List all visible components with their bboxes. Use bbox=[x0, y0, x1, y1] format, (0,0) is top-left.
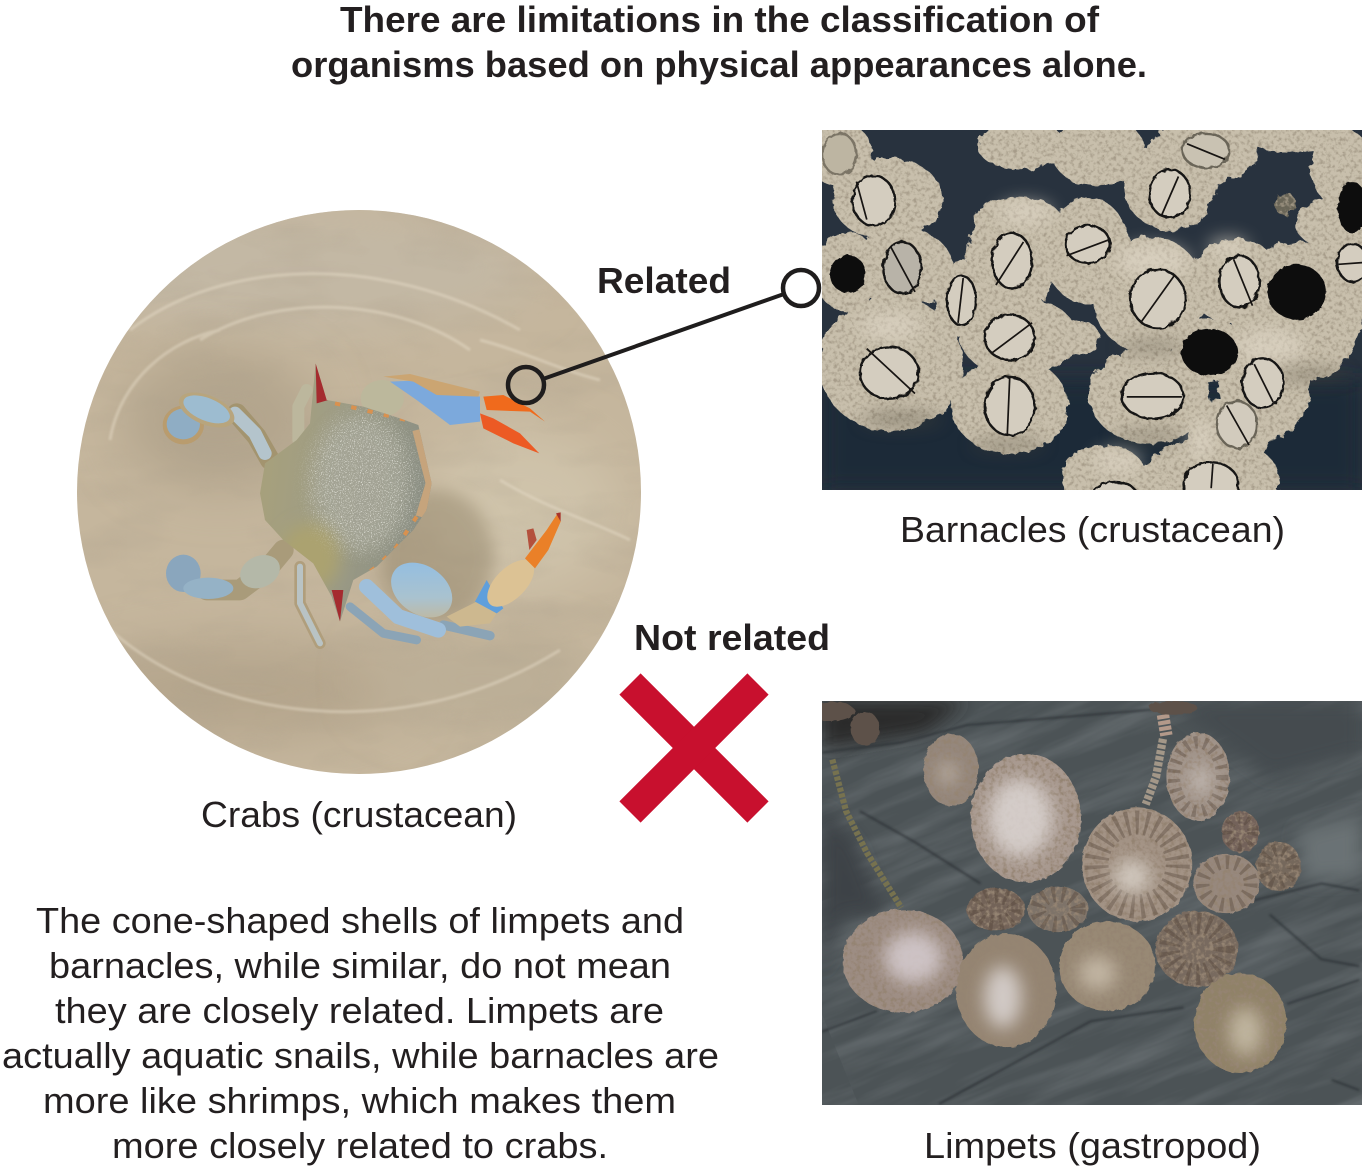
top-left corner limpets bbox=[807, 701, 1197, 746]
photo: crab in circle bbox=[60, 210, 641, 774]
icon: red cross bbox=[630, 684, 758, 812]
crab shadow bbox=[380, 490, 493, 623]
barnacle shadows bbox=[860, 341, 1349, 452]
barnacle holes bbox=[830, 182, 1363, 376]
limpet highlights bbox=[884, 764, 1262, 1056]
barnacle highlights bbox=[860, 201, 1304, 473]
rock cracks bbox=[822, 710, 1359, 1104]
label: limpets: Limpets (gastropod) bbox=[924, 1125, 1261, 1166]
photo: limpets bbox=[807, 701, 1362, 1105]
label: crabs: Crabs (crustacean) bbox=[201, 794, 517, 835]
body text bbox=[2, 900, 719, 1166]
crab upper claw bbox=[384, 374, 545, 454]
barnacle openings bbox=[822, 133, 1363, 510]
crab left paddles bbox=[163, 385, 285, 599]
body text: they are closely related. Limpets are bbox=[55, 990, 664, 1031]
title: There are limitations in the classification of bbox=[340, 0, 1100, 40]
barnacle bodies bbox=[822, 130, 1362, 490]
barnacle plate lines bbox=[856, 144, 1362, 488]
crab shell bbox=[257, 360, 437, 627]
body text: more closely related to crabs. bbox=[112, 1125, 608, 1166]
body text: The cone-shaped shells of limpets and bbox=[36, 900, 684, 941]
connector: related bbox=[508, 270, 819, 403]
crab lower claw bbox=[381, 512, 561, 629]
rock shading bbox=[822, 701, 1362, 977]
label: related: Related bbox=[597, 260, 731, 301]
body text: more like shrimps, which makes them bbox=[43, 1080, 676, 1121]
body text: actually aquatic snails, while barnacles are bbox=[2, 1035, 719, 1076]
title bbox=[291, 0, 1147, 85]
title: organisms based on physical appearances alone. bbox=[291, 44, 1147, 85]
limpet shells bbox=[843, 733, 1301, 1073]
limpet ribs bbox=[977, 742, 1293, 974]
label: barnacles: Barnacles (crustacean) bbox=[900, 509, 1285, 550]
crab legs bbox=[207, 390, 490, 643]
body text: barnacles, while similar, do not mean bbox=[49, 945, 671, 986]
label: not related: Not related bbox=[634, 617, 830, 658]
photo: barnacles bbox=[822, 130, 1362, 490]
small barnacle chains bbox=[832, 715, 1166, 908]
